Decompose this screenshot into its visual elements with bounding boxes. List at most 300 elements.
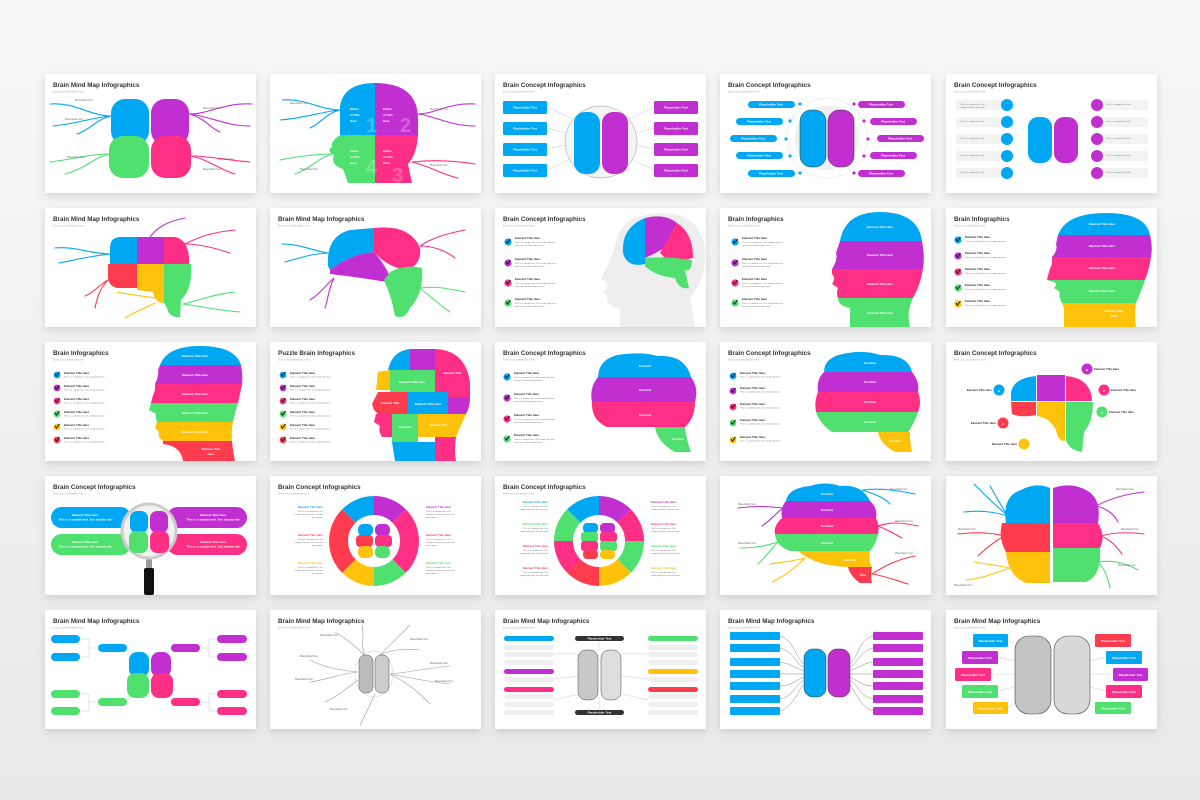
checklist: This is a sample text. You simply edit your	[290, 402, 331, 404]
brain bands: Text Box	[864, 361, 877, 365]
checklist: This is a sample text. You simply edit your	[514, 376, 555, 379]
side text: This is a sample text. You	[651, 505, 677, 508]
title: Enter your subheadline here	[278, 224, 310, 228]
branches: Placeholder Text	[890, 488, 908, 491]
checklist: This is a sample text. You simply edit your	[514, 438, 555, 441]
right boxes: Placeholder Text	[664, 106, 688, 110]
head bands: Element Title Here	[182, 392, 208, 396]
checklist: This is a sample text. You simply edit your	[965, 240, 1006, 243]
slide 20: six-part brain mind map	[946, 476, 1157, 595]
title	[278, 618, 365, 630]
side text: This is a sample text. You	[426, 510, 452, 513]
title: Brain Concept Infographics	[728, 350, 811, 357]
side text: description.	[426, 516, 438, 519]
left boxes: Placeholder Text	[968, 690, 992, 694]
title: Brain Mind Map Infographics	[278, 216, 365, 223]
title: Enter your subheadline here	[278, 492, 310, 496]
checklist: Element Title Here	[965, 283, 991, 287]
checklist: Element Title Here	[290, 397, 316, 401]
checklist: Element Title Here	[64, 384, 90, 388]
checklist: Element Title Here	[740, 402, 766, 406]
labels: Placeholder Text	[435, 680, 453, 683]
side text: description.	[312, 516, 323, 519]
title: Brain Mind Map Infographics	[954, 618, 1041, 625]
branches: Placeholder Text	[290, 102, 308, 105]
head quadrants: Here	[383, 161, 390, 165]
checklist: This is a sample text. You simply edit your	[965, 288, 1006, 291]
slide 5: brain with icon circles: This is a sample text. You	[1106, 171, 1132, 174]
checklist: Element Title Here	[742, 236, 768, 240]
pills: This is a sample text. You simply edit	[187, 544, 239, 548]
title: Brain Concept Infographics	[954, 82, 1037, 89]
inner brain	[356, 524, 392, 558]
title: Enter your subheadline here	[503, 626, 535, 630]
brain segments	[328, 227, 422, 317]
right boxes: Placeholder Text	[664, 126, 688, 130]
brain	[1015, 636, 1090, 714]
title: Enter your subheadline here	[954, 626, 986, 630]
right boxes: Placeholder Text	[1101, 639, 1125, 643]
title: Brain Infographics	[53, 350, 109, 357]
title	[278, 350, 355, 362]
checklist: This is a sample text. You simply edit your	[290, 388, 331, 392]
letter callouts: Element Title Here	[1094, 367, 1120, 371]
side text: Element Title Here	[651, 500, 677, 504]
title	[53, 618, 140, 630]
brain lobes	[623, 216, 693, 288]
brain bands: Text Box	[844, 558, 857, 562]
brain bands: Text Box	[889, 439, 902, 443]
left boxes: Placeholder Text	[513, 106, 537, 110]
brain bands: Text Box	[821, 524, 834, 528]
title: Enter your subheadline here	[954, 358, 986, 362]
pills	[51, 507, 247, 555]
side text: This is a sample text. You	[523, 571, 549, 574]
slide 22: gray brain line mind map	[270, 610, 481, 729]
checklist: This is a sample text. You simply edit your	[742, 262, 783, 265]
side text: Element Title Here	[523, 566, 548, 570]
puzzle head: Element Title	[443, 371, 462, 375]
checklist: own text and description here.	[514, 400, 544, 403]
title: Brain Mind Map Infographics	[503, 618, 590, 625]
head bands: Element Title Here	[182, 373, 208, 377]
side text: simply add your own text and	[651, 574, 680, 577]
side text: description.	[426, 572, 438, 575]
branches: Placeholder Text	[954, 584, 972, 587]
checklist: This is a sample text. You simply edit your	[290, 414, 331, 418]
brain bands	[775, 484, 879, 583]
pill labels: Placeholder Text	[759, 172, 783, 176]
right lists	[648, 636, 698, 715]
slide 5: brain with icon circles: This is a sample text. You	[1106, 137, 1132, 140]
brain	[355, 651, 393, 697]
labels: Placeholder Text	[330, 708, 348, 711]
brain	[1028, 117, 1078, 163]
checklist: Element Title Here	[64, 371, 90, 375]
head quadrants: Here	[350, 119, 357, 123]
title: Brain Concept Infographics	[503, 216, 586, 223]
checklist: Element Title Here	[290, 384, 316, 388]
checklist: own text and description here.	[742, 285, 772, 288]
letter callouts	[967, 364, 1137, 450]
slide 19: brain bands mind map	[720, 476, 931, 595]
title	[53, 484, 136, 496]
side text: Element Title Here	[298, 561, 323, 565]
checklist: This is a sample text. You simply edit your	[64, 428, 105, 430]
side text: Element Title Here	[426, 533, 452, 537]
slide 12: puzzle brain head	[270, 342, 481, 461]
checklist: This is a sample text. You simply edit your	[64, 388, 105, 392]
checklist: This is a sample text. You simply edit your	[515, 241, 556, 244]
head quadrants: Here	[350, 161, 357, 165]
title	[954, 618, 1041, 630]
branches: Placeholder Text	[895, 520, 913, 523]
checklist: This is a sample text. You simply edit your	[290, 440, 331, 444]
branches: Placeholder Text	[1116, 488, 1134, 491]
pills	[51, 635, 247, 715]
right pills	[858, 101, 924, 177]
letter callouts: Element Title Here	[967, 388, 992, 392]
branches: Placeholder Text	[67, 156, 85, 159]
side text: Element Title Here	[651, 544, 677, 548]
side text: description.	[312, 544, 323, 547]
slide 17: ring brain 6 segments	[270, 476, 481, 595]
title	[503, 484, 586, 496]
letter callouts: F	[1002, 422, 1004, 426]
side text: simply add your own text and	[295, 541, 324, 544]
checklist: Element Title Here	[965, 251, 991, 255]
title	[503, 350, 586, 362]
side text: simply add your own text and	[295, 513, 324, 516]
slide 5: brain with icon circles: This is a sample text. You	[960, 171, 986, 174]
head quadrants: Eleme	[383, 149, 392, 153]
pills: Element Title Here	[200, 513, 226, 517]
left pills	[730, 101, 795, 177]
checklist: Element Title Here	[515, 236, 541, 240]
labels: Placeholder Text	[410, 638, 428, 641]
title	[53, 350, 109, 362]
pill labels: Placeholder Text	[869, 172, 893, 176]
checklist	[503, 371, 555, 444]
title: Brain Infographics	[954, 216, 1010, 223]
title	[954, 82, 1037, 94]
title	[278, 216, 365, 228]
checklist: This is a sample text. You simply edit your	[742, 282, 783, 285]
title: Enter your subheadline here	[503, 492, 535, 496]
checklist: own text and description here.	[514, 421, 544, 424]
head quadrants: 3	[392, 165, 403, 187]
left boxes: Placeholder Text	[513, 126, 537, 130]
checklist: This is a sample text. You simply edit your	[515, 262, 556, 265]
checklist: This is a sample text. You simply edit your	[742, 302, 783, 305]
slide 5: brain with icon circles: This is a sample text. You	[960, 137, 986, 140]
branches: Placeholder Text	[430, 108, 448, 111]
branches	[282, 230, 465, 312]
brain bands: Text Box	[864, 420, 877, 424]
brain bands	[591, 353, 696, 452]
branches: Placeholder Text	[203, 168, 221, 171]
slide 2: head quadrants	[270, 74, 481, 193]
side text: This is a sample text. You	[523, 527, 549, 530]
head bands: Element Title	[202, 447, 221, 451]
side text: Element Title Here	[298, 505, 323, 509]
checklist: This is a sample text. You simply edit your	[64, 414, 105, 418]
checklist: Element Title Here	[514, 392, 540, 396]
puzzle head: Element Title	[381, 401, 400, 405]
title: Brain Concept Infographics	[954, 350, 1037, 357]
title: Enter your subheadline here	[728, 224, 760, 228]
branches: Placeholder Text	[430, 164, 448, 167]
checklist: This is a sample text. You simply edit your	[740, 376, 781, 378]
side text: Element Title Here	[651, 566, 677, 570]
letter callouts: Element Title Here	[992, 442, 1017, 446]
side text: This is a sample text. You	[523, 505, 549, 508]
head quadrants: Eleme	[350, 107, 359, 111]
side text: This is a sample text. You	[298, 566, 324, 569]
side text: Element Title Here	[426, 561, 452, 565]
head quadrants: 1	[366, 115, 377, 137]
brain	[1001, 485, 1103, 583]
title: Enter your subheadline here	[954, 90, 986, 94]
checklist: Element Title Here	[290, 423, 316, 427]
top and bottom dark pills: Placeholder Text	[588, 710, 611, 714]
brain circle	[565, 106, 637, 178]
side text: simply add your own text and	[651, 552, 680, 555]
head bands: Element Title Here	[867, 253, 893, 257]
head bands	[1047, 213, 1152, 327]
branches	[50, 99, 252, 174]
checklist: own text and description here.	[515, 305, 545, 308]
pill labels: Placeholder Text	[869, 102, 893, 106]
brain bands: Text Box	[639, 413, 652, 417]
left boxes: Placeholder Text	[513, 148, 537, 152]
brain bands: Text Box	[864, 400, 877, 404]
title: Enter your subheadline here	[728, 90, 760, 94]
checklist: Element Title Here	[965, 299, 991, 303]
title: Enter your subheadline here	[53, 224, 85, 228]
puzzle head: Element Title Here	[415, 402, 441, 406]
letter callouts: B	[1086, 368, 1089, 372]
pill labels: Placeholder Text	[759, 102, 783, 106]
checklist: This is a sample text. You simply edit your	[515, 302, 556, 305]
checklist: Element Title Here	[740, 418, 766, 422]
side text: simply add your own text and	[295, 569, 324, 572]
labels: Placeholder Text	[430, 662, 448, 665]
checklist: Element Title Here	[514, 413, 540, 417]
checklist: Element Title Here	[290, 436, 316, 440]
checklist	[730, 371, 781, 443]
head bands: Element Title Here	[1089, 222, 1115, 226]
checklist: Element Title Here	[64, 436, 90, 440]
checklist: This is a sample text. You simply edit your	[290, 428, 331, 430]
letter callouts: E	[1023, 443, 1025, 447]
head bands: Element Title Here	[182, 354, 208, 358]
slide 23: gray brain with lists	[495, 610, 706, 729]
letter callouts: C	[1103, 389, 1106, 393]
title: Enter your subheadline here	[53, 492, 85, 496]
side text: This is a sample text. You	[651, 527, 677, 530]
left boxes: Placeholder Text	[961, 673, 985, 677]
slide 18: ring brain 8 segments	[495, 476, 706, 595]
title: Brain Concept Infographics	[503, 350, 586, 357]
connectors	[991, 640, 1113, 708]
puzzle head	[372, 349, 470, 461]
branches: Placeholder Text	[300, 168, 318, 171]
checklist: Element Title Here	[965, 267, 991, 271]
head bands: Element Title Here	[867, 311, 893, 315]
checklist: This is a sample text. You simply edit your	[515, 282, 556, 285]
text bars	[956, 100, 1148, 178]
branches: Placeholder Text	[1121, 528, 1139, 531]
head bands: Element Title Here	[182, 411, 208, 415]
side text: description.	[312, 572, 323, 575]
checklist: Element Title Here	[965, 235, 991, 239]
checklist: Element Title Here	[742, 297, 768, 301]
slide 5: brain with icon circles: This is a sample text. You	[960, 120, 986, 123]
title: Brain Concept Infographics	[278, 484, 361, 491]
head quadrants: nt Title	[350, 113, 360, 117]
side text: simply add your own text and	[426, 569, 455, 572]
title: Brain Concept Infographics	[503, 484, 586, 491]
gray head	[601, 213, 705, 327]
puzzle head: Element Title Here	[399, 380, 425, 384]
checklist: This is a sample text. You simply edit your	[740, 390, 781, 394]
checklist: Element Title Here	[290, 371, 316, 375]
head bands: Element Title Here	[182, 430, 208, 434]
connectors	[80, 639, 217, 711]
branches: Placeholder Text	[738, 503, 756, 506]
pills: Element Title Here	[72, 540, 98, 544]
brain	[804, 649, 850, 697]
side text: simply add your own text and	[520, 552, 549, 555]
right boxes	[1095, 634, 1148, 714]
puzzle brain	[108, 237, 191, 317]
title	[503, 618, 590, 630]
title: Brain Mind Map Infographics	[728, 618, 815, 625]
title	[278, 484, 361, 496]
right boxes: Placeholder Text	[1112, 690, 1136, 694]
branches	[280, 100, 475, 178]
checklist: This is a sample text. You simply edit your	[64, 376, 105, 378]
slide 5: brain with icon circles: This is a sample text. You	[1106, 154, 1132, 157]
slide 5: brain with icon circles: This is a sample text. You	[1106, 120, 1132, 123]
branches	[954, 484, 1144, 588]
title: Brain Concept Infographics	[503, 82, 586, 89]
pill labels	[741, 102, 912, 176]
brain bands	[815, 352, 920, 452]
inner brain	[581, 523, 617, 559]
pill labels: Placeholder Text	[881, 154, 905, 158]
pills: Element Title Here	[200, 540, 226, 544]
title: Puzzle Brain Infographics	[278, 350, 355, 357]
checklist	[280, 371, 331, 444]
top and bottom dark pills: Placeholder Text	[588, 636, 611, 640]
pills: This is a sample text. You simply edit	[187, 518, 239, 522]
side text: Element Title Here	[523, 522, 548, 526]
brain bands: Text	[860, 573, 866, 577]
title: Enter your subheadline here	[728, 358, 760, 362]
slide 10: head with 5 bands	[946, 208, 1157, 327]
side text: This is a sample text. You	[298, 510, 324, 513]
dots	[784, 102, 802, 175]
checklist: This is a sample text. You simply edit your	[965, 256, 1006, 259]
slide 1: brain mind map quadrants	[45, 74, 256, 193]
checklist: Element Title Here	[64, 397, 90, 401]
brain bands: Text Box	[864, 380, 877, 384]
checklist: own text and description here.	[742, 305, 772, 308]
slide 5: brain with icon circles	[946, 74, 1157, 193]
title: Enter your subheadline here	[503, 224, 535, 228]
slide 14: brain bands 5	[720, 342, 931, 461]
checklist: This is a sample text. You simply edit your	[965, 304, 1006, 307]
slide 5: brain with icon circles: This is a sample text. You	[960, 103, 986, 106]
side text: simply add your own text and	[651, 508, 680, 511]
letter callouts: D	[1101, 411, 1104, 415]
right boxes: Placeholder Text	[1112, 656, 1136, 660]
head quadrants: 4	[366, 157, 378, 179]
slide 15: brain with lettered callouts	[946, 342, 1157, 461]
title	[728, 350, 811, 362]
head quadrants: nt Title	[383, 155, 393, 159]
side text: This is a sample text. You	[426, 538, 452, 541]
head bands: Element Title Here	[1089, 289, 1115, 293]
title: Brain Concept Infographics	[728, 82, 811, 89]
pill labels: Placeholder Text	[888, 136, 912, 140]
checklist: own text and description here.	[515, 265, 545, 268]
title	[503, 82, 586, 94]
head bands	[149, 346, 242, 461]
slide 6: puzzle brain mind map	[45, 208, 256, 327]
slide 25: gray brain with colored boxes	[946, 610, 1157, 729]
checklist: Element Title Here	[64, 410, 90, 414]
side text	[295, 505, 455, 575]
connectors	[780, 636, 873, 711]
checklist: This is a sample text. You simply edit your	[64, 402, 105, 404]
checklist: own text and description here.	[514, 379, 544, 382]
puzzle head: Element Title	[429, 423, 448, 427]
checklist: This is a sample text. You simply edit your	[514, 397, 555, 400]
brain pieces	[1011, 375, 1093, 452]
pill labels: Placeholder Text	[747, 120, 771, 124]
side text: This is a sample text. You	[651, 571, 677, 574]
title: Enter your subheadline here	[53, 626, 85, 630]
title	[728, 82, 811, 94]
top and bottom dark pills	[575, 636, 624, 715]
side text: Element Title Here	[298, 533, 323, 537]
checklist: own text and description here.	[515, 244, 545, 247]
icons	[1001, 99, 1013, 179]
slide 9: head with 4 bands	[720, 208, 931, 327]
brain	[787, 98, 867, 178]
brain bands: Text Box	[821, 541, 834, 545]
title: Enter your subheadline here	[954, 224, 986, 228]
branches: Placeholder Text	[75, 99, 93, 102]
side text: simply add your own text and	[520, 508, 549, 511]
letter callouts: A	[998, 389, 1001, 393]
brain bands: Text Box	[672, 437, 685, 441]
ring	[329, 496, 419, 586]
checklist: This is a sample text. You simply edit your	[290, 376, 331, 378]
side text: This is a sample text. You	[523, 549, 549, 552]
pills: This is a sample text. You simply edit	[59, 544, 111, 548]
side text: This is a sample text. You	[651, 549, 677, 552]
checklist: Element Title Here	[515, 277, 541, 281]
left boxes	[730, 632, 780, 715]
right boxes: Placeholder Text	[664, 168, 688, 172]
brain bands: Text Box	[639, 364, 652, 368]
title: Brain Concept Infographics	[53, 484, 136, 491]
checklist	[54, 371, 105, 444]
